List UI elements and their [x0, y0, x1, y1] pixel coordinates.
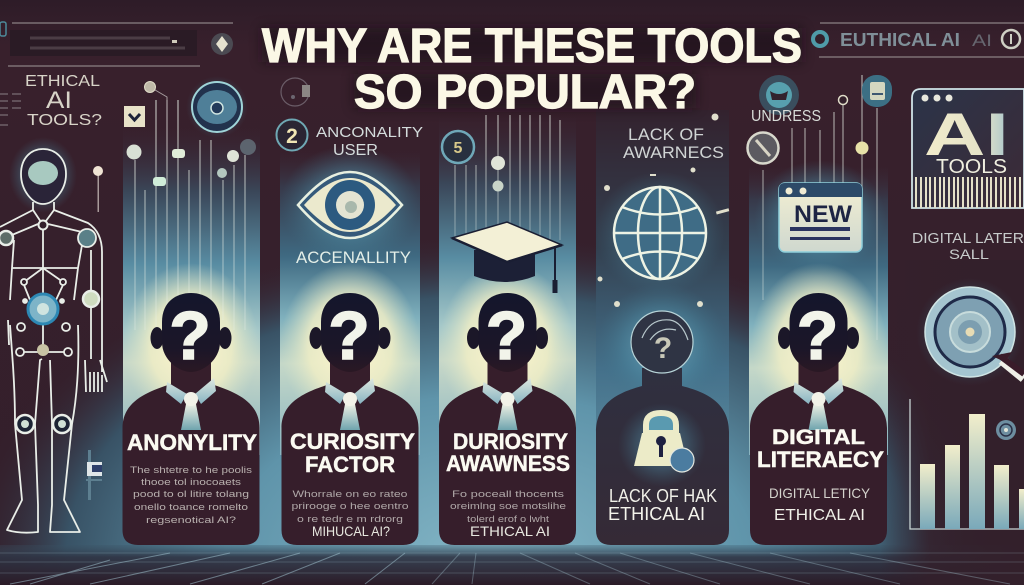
icon: browser window new [779, 183, 862, 252]
AI tools card: TOOLS [936, 156, 1007, 178]
label: anonymity user [316, 124, 423, 159]
person card 5: digital literacy: LITERAECY [757, 447, 884, 472]
label: anonymity user: USER [333, 142, 378, 159]
person card 4: lack of ethical AI [596, 311, 729, 545]
title: SO POPULAR? [354, 66, 696, 119]
icon: eye [298, 172, 402, 238]
icon: globe [614, 187, 706, 279]
person card 4: lack of ethical AI: ETHICAL AI [608, 504, 705, 524]
label: accenality: ACCENALLITY [296, 249, 411, 267]
badge 5: 5 [454, 140, 463, 157]
person card 1: anonymity: onello toance romelto [134, 502, 248, 513]
person card 3: awareness: oreimlng soe motslihe [450, 501, 566, 512]
person card 5: digital literacy: DIGITAL LETICY [769, 485, 871, 501]
small bracket icon [86, 450, 102, 500]
icon: undress badge [759, 75, 799, 115]
label: undress: UNDRESS [751, 108, 821, 125]
person card 3: awareness: ? [486, 298, 527, 374]
bar chart [910, 399, 1024, 529]
label: lack of awareness [623, 125, 724, 162]
person card 5: digital literacy: ? [797, 298, 838, 374]
person card 1: anonymity: thooe tol inocoaets [141, 477, 241, 488]
person card 2: curiosity factor: Whorrale on eo rateo [292, 489, 408, 500]
floor grid [0, 553, 1024, 584]
side node [93, 166, 103, 212]
person card 2: curiosity factor: FACTOR [305, 452, 395, 477]
icon: slashed circle [748, 132, 778, 164]
side label: ethical AI tools [25, 73, 102, 129]
icon: target ring [186, 76, 248, 138]
label: anonymity user: ANCONALITY [316, 124, 423, 141]
label: digital later: SALL [949, 246, 989, 262]
person card 1: anonymity: pood to ol litire tolang [133, 489, 249, 500]
icon: pill badge [862, 75, 892, 107]
panel 1 background: anonymity [123, 100, 260, 455]
person card 4: lack of ethical AI: LACK OF HAK [609, 486, 717, 506]
label: digital later: DIGITAL LATER [912, 230, 1024, 247]
person card 2: curiosity factor: MIHUCAL AI? [312, 524, 390, 539]
side label: ethical AI tools: ETHICAL [25, 73, 100, 90]
side label: ethical AI tools: TOOLS? [27, 112, 102, 129]
panel 4 background: lack of awareness [595, 110, 729, 455]
icon: browser window new: NEW [794, 201, 852, 228]
label: lack of awareness: LACK OF [628, 125, 704, 144]
panel 3 background: awareness [439, 115, 576, 455]
icon: magnifier [916, 278, 1024, 386]
person card 3: awareness: AWAWNESS [446, 451, 570, 476]
badge 5 [442, 131, 474, 163]
top right header [813, 23, 1024, 57]
person card 3: awareness: DURIOSITY [453, 429, 568, 454]
person card 2: curiosity factor: ? [328, 298, 370, 374]
title: WHY ARE THESE TOOLS [262, 20, 802, 73]
title [262, 20, 802, 119]
AI tools card: AI [924, 101, 1009, 168]
person card 5: digital literacy: DIGITAL [772, 426, 865, 449]
person card 2: curiosity factor: prirooge o hee oentro [292, 501, 408, 512]
person card 5: digital literacy: ETHICAL AI [774, 507, 865, 524]
person card 3: awareness: tolerd erof o lwht [467, 514, 549, 525]
connector nodes [838, 96, 868, 154]
badge 2 [276, 120, 308, 150]
person card 3: awareness: ETHICAL AI [470, 523, 550, 539]
dim circle icon [281, 78, 310, 106]
icon: checkbox [124, 106, 145, 127]
person card 3: awareness [439, 293, 576, 545]
person card 1: anonymity: ANONYLITY [127, 430, 257, 455]
top right header: AI [972, 31, 992, 50]
person card 1: anonymity [122, 293, 260, 545]
panel 2 background: curiosity [280, 145, 420, 455]
person card 4: lack of ethical AI: ? [654, 332, 672, 365]
top right header: EUTHICAL AI [840, 30, 960, 50]
person card 2: curiosity factor: o re tedr e m rdrorg [297, 514, 403, 525]
side list marks [0, 94, 21, 125]
badge 2: 2 [286, 125, 298, 148]
label: digital later [912, 230, 1024, 262]
person card 3: awareness: Fo poceall thocents [452, 489, 564, 500]
icon: graduation cap [452, 222, 562, 293]
connector node [144, 82, 167, 150]
person card 1: anonymity: ? [169, 298, 211, 374]
sparks around globe [598, 114, 729, 307]
person card 2: curiosity factor: CURIOSITY [290, 429, 415, 454]
panel 5 background: digital literacy [749, 75, 888, 455]
person card 5: digital literacy [750, 293, 887, 545]
person card 1: anonymity: The shtetre to he poolis [130, 465, 252, 476]
label: lack of awareness: AWARNECS [623, 143, 724, 162]
person card 1: anonymity: regsenotical AI? [146, 515, 236, 526]
top left header bar [0, 22, 233, 66]
AI tools card [912, 89, 1024, 208]
figure: human body diagram [0, 137, 107, 533]
person card 2: curiosity factor [282, 293, 418, 545]
side label: ethical AI tools: AI [46, 87, 72, 114]
